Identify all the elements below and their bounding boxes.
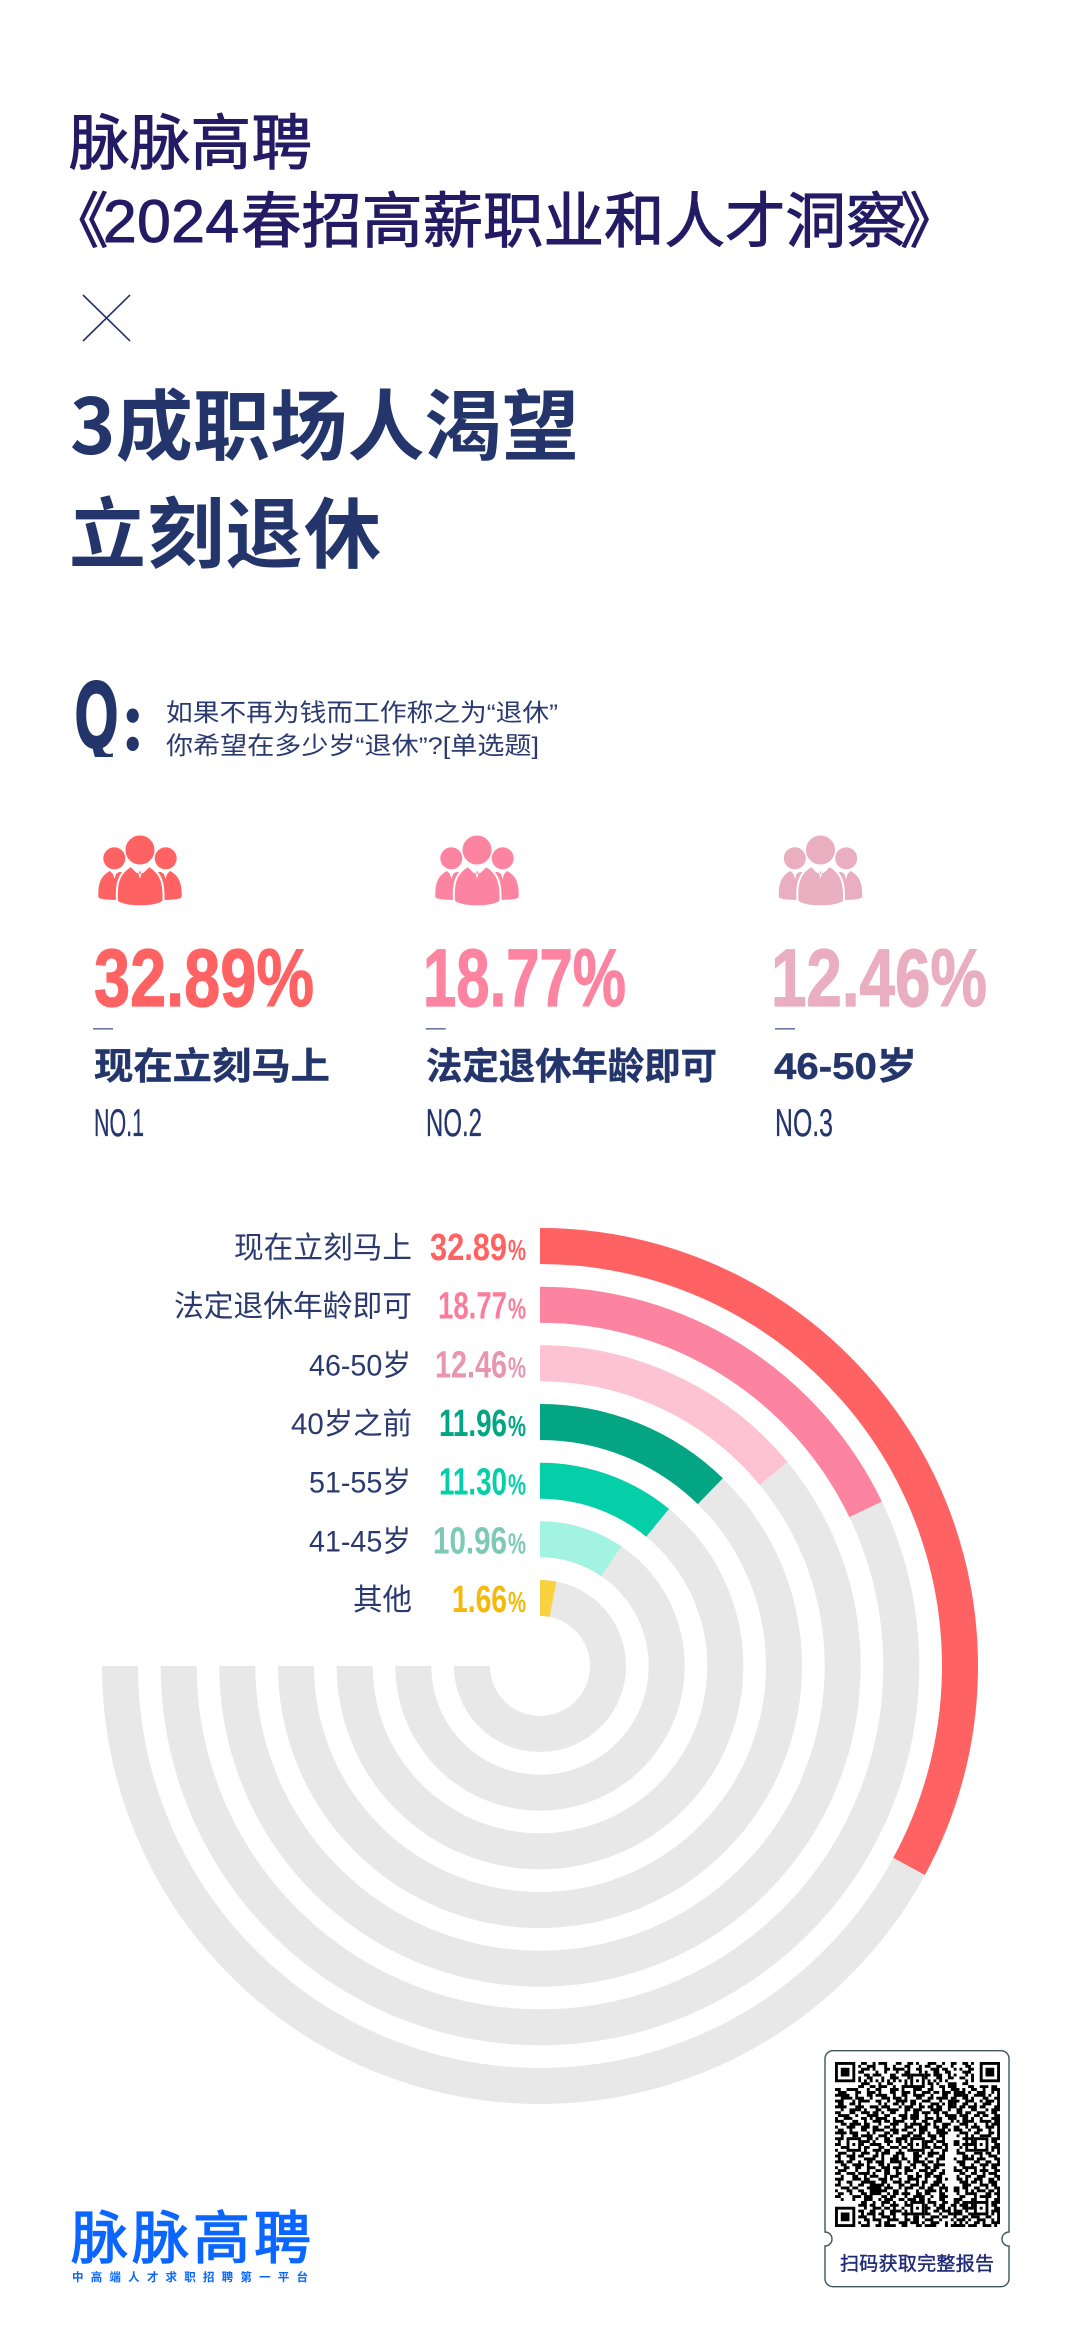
icon: people pink xyxy=(435,835,519,906)
legend row 2: 法定退休年龄即可 xyxy=(174,1291,412,1324)
value 18.77%: 18.77% xyxy=(423,933,626,1024)
panel: QR code card xyxy=(825,2051,1009,2287)
answer label: 法定退休年龄即可 xyxy=(426,1046,717,1087)
logo: Maimai Gaopin: 脉脉高聘 xyxy=(71,2207,311,2271)
legend row 6: 41-45岁 xyxy=(309,1525,411,1558)
title: report name: 《 xyxy=(48,187,108,255)
legend row 6: % xyxy=(508,1528,526,1560)
icon: people red xyxy=(98,835,182,906)
legend row 1: 32.89 xyxy=(430,1227,507,1269)
title: report name: 脉脉高聘 xyxy=(69,109,312,177)
question text: 如果不再为钱而工作称之为“退休” xyxy=(166,699,558,727)
value 12.46%: 12.46% xyxy=(771,933,987,1024)
title: report name: 2024 xyxy=(103,187,239,255)
legend row 3: 12.46 xyxy=(435,1344,507,1386)
heading: main headline xyxy=(69,366,579,585)
icon: Q mark: : xyxy=(120,673,146,770)
panel: top three answers xyxy=(93,835,987,1145)
legend row 1 xyxy=(234,1227,526,1269)
rank: NO.3 xyxy=(775,1102,833,1145)
legend row 4: 40岁之前 xyxy=(291,1408,412,1441)
value 32.89%: 32.89% xyxy=(94,933,314,1024)
QR code xyxy=(835,2062,1000,2227)
legend row 5 xyxy=(309,1462,526,1504)
legend row 7: 其他 xyxy=(353,1584,412,1617)
question text: 你希望在多少岁“退休”?[单选题] xyxy=(166,732,539,760)
legend row 3: % xyxy=(508,1352,526,1384)
top item 2 xyxy=(423,835,717,1145)
rank: NO.2 xyxy=(426,1102,482,1145)
legend row 5: % xyxy=(508,1470,526,1502)
legend row 1: 现在立刻马上 xyxy=(234,1232,412,1265)
legend row 3 xyxy=(309,1344,526,1386)
legend row 3: 46-50岁 xyxy=(309,1349,411,1382)
icon: Q mark xyxy=(76,680,139,757)
legend row 2: 18.77 xyxy=(438,1286,507,1328)
question block xyxy=(76,680,558,759)
legend row 4: % xyxy=(508,1411,526,1443)
legend row 7 xyxy=(353,1579,526,1621)
legend row 7: % xyxy=(508,1587,526,1619)
answer label: 现在立刻马上 xyxy=(94,1046,330,1087)
rank: NO.1 xyxy=(94,1102,144,1145)
legend row 2 xyxy=(174,1286,526,1328)
legend row 6 xyxy=(309,1520,526,1562)
QR caption: 扫码获取完整报告 xyxy=(840,2253,994,2275)
title: report name xyxy=(48,109,960,255)
title: report name: 》 xyxy=(900,187,960,255)
legend row 6: 10.96 xyxy=(433,1520,507,1562)
top item 1 xyxy=(93,835,330,1145)
heading: main headline: 立刻退休 xyxy=(69,474,381,585)
icon: people pale pink xyxy=(779,835,862,906)
chart: radial bars xyxy=(120,1246,960,2086)
legend row 4: 11.96 xyxy=(439,1403,507,1445)
legend row 5: 51-55岁 xyxy=(309,1467,411,1500)
icon: Q mark: Q xyxy=(75,662,118,767)
title: report name: 春招高薪职业和人才洞察 xyxy=(241,187,906,255)
legend row 1: % xyxy=(508,1235,526,1267)
legend row 2: % xyxy=(508,1294,526,1326)
icon: cross symbol xyxy=(83,295,130,341)
logo: Maimai Gaopin: 中高端人才求职招聘第一平台 xyxy=(72,2270,308,2284)
legend row 7: 1.66 xyxy=(452,1579,507,1621)
question text xyxy=(166,699,558,760)
answer label: 46-50岁 xyxy=(774,1046,917,1087)
legend row 4 xyxy=(291,1403,526,1445)
legend: answer labels and percentages xyxy=(174,1227,526,1621)
heading: main headline: 3成职场人渴望 xyxy=(70,366,579,477)
legend row 5: 11.30 xyxy=(439,1462,507,1504)
top item 3 xyxy=(771,835,987,1145)
